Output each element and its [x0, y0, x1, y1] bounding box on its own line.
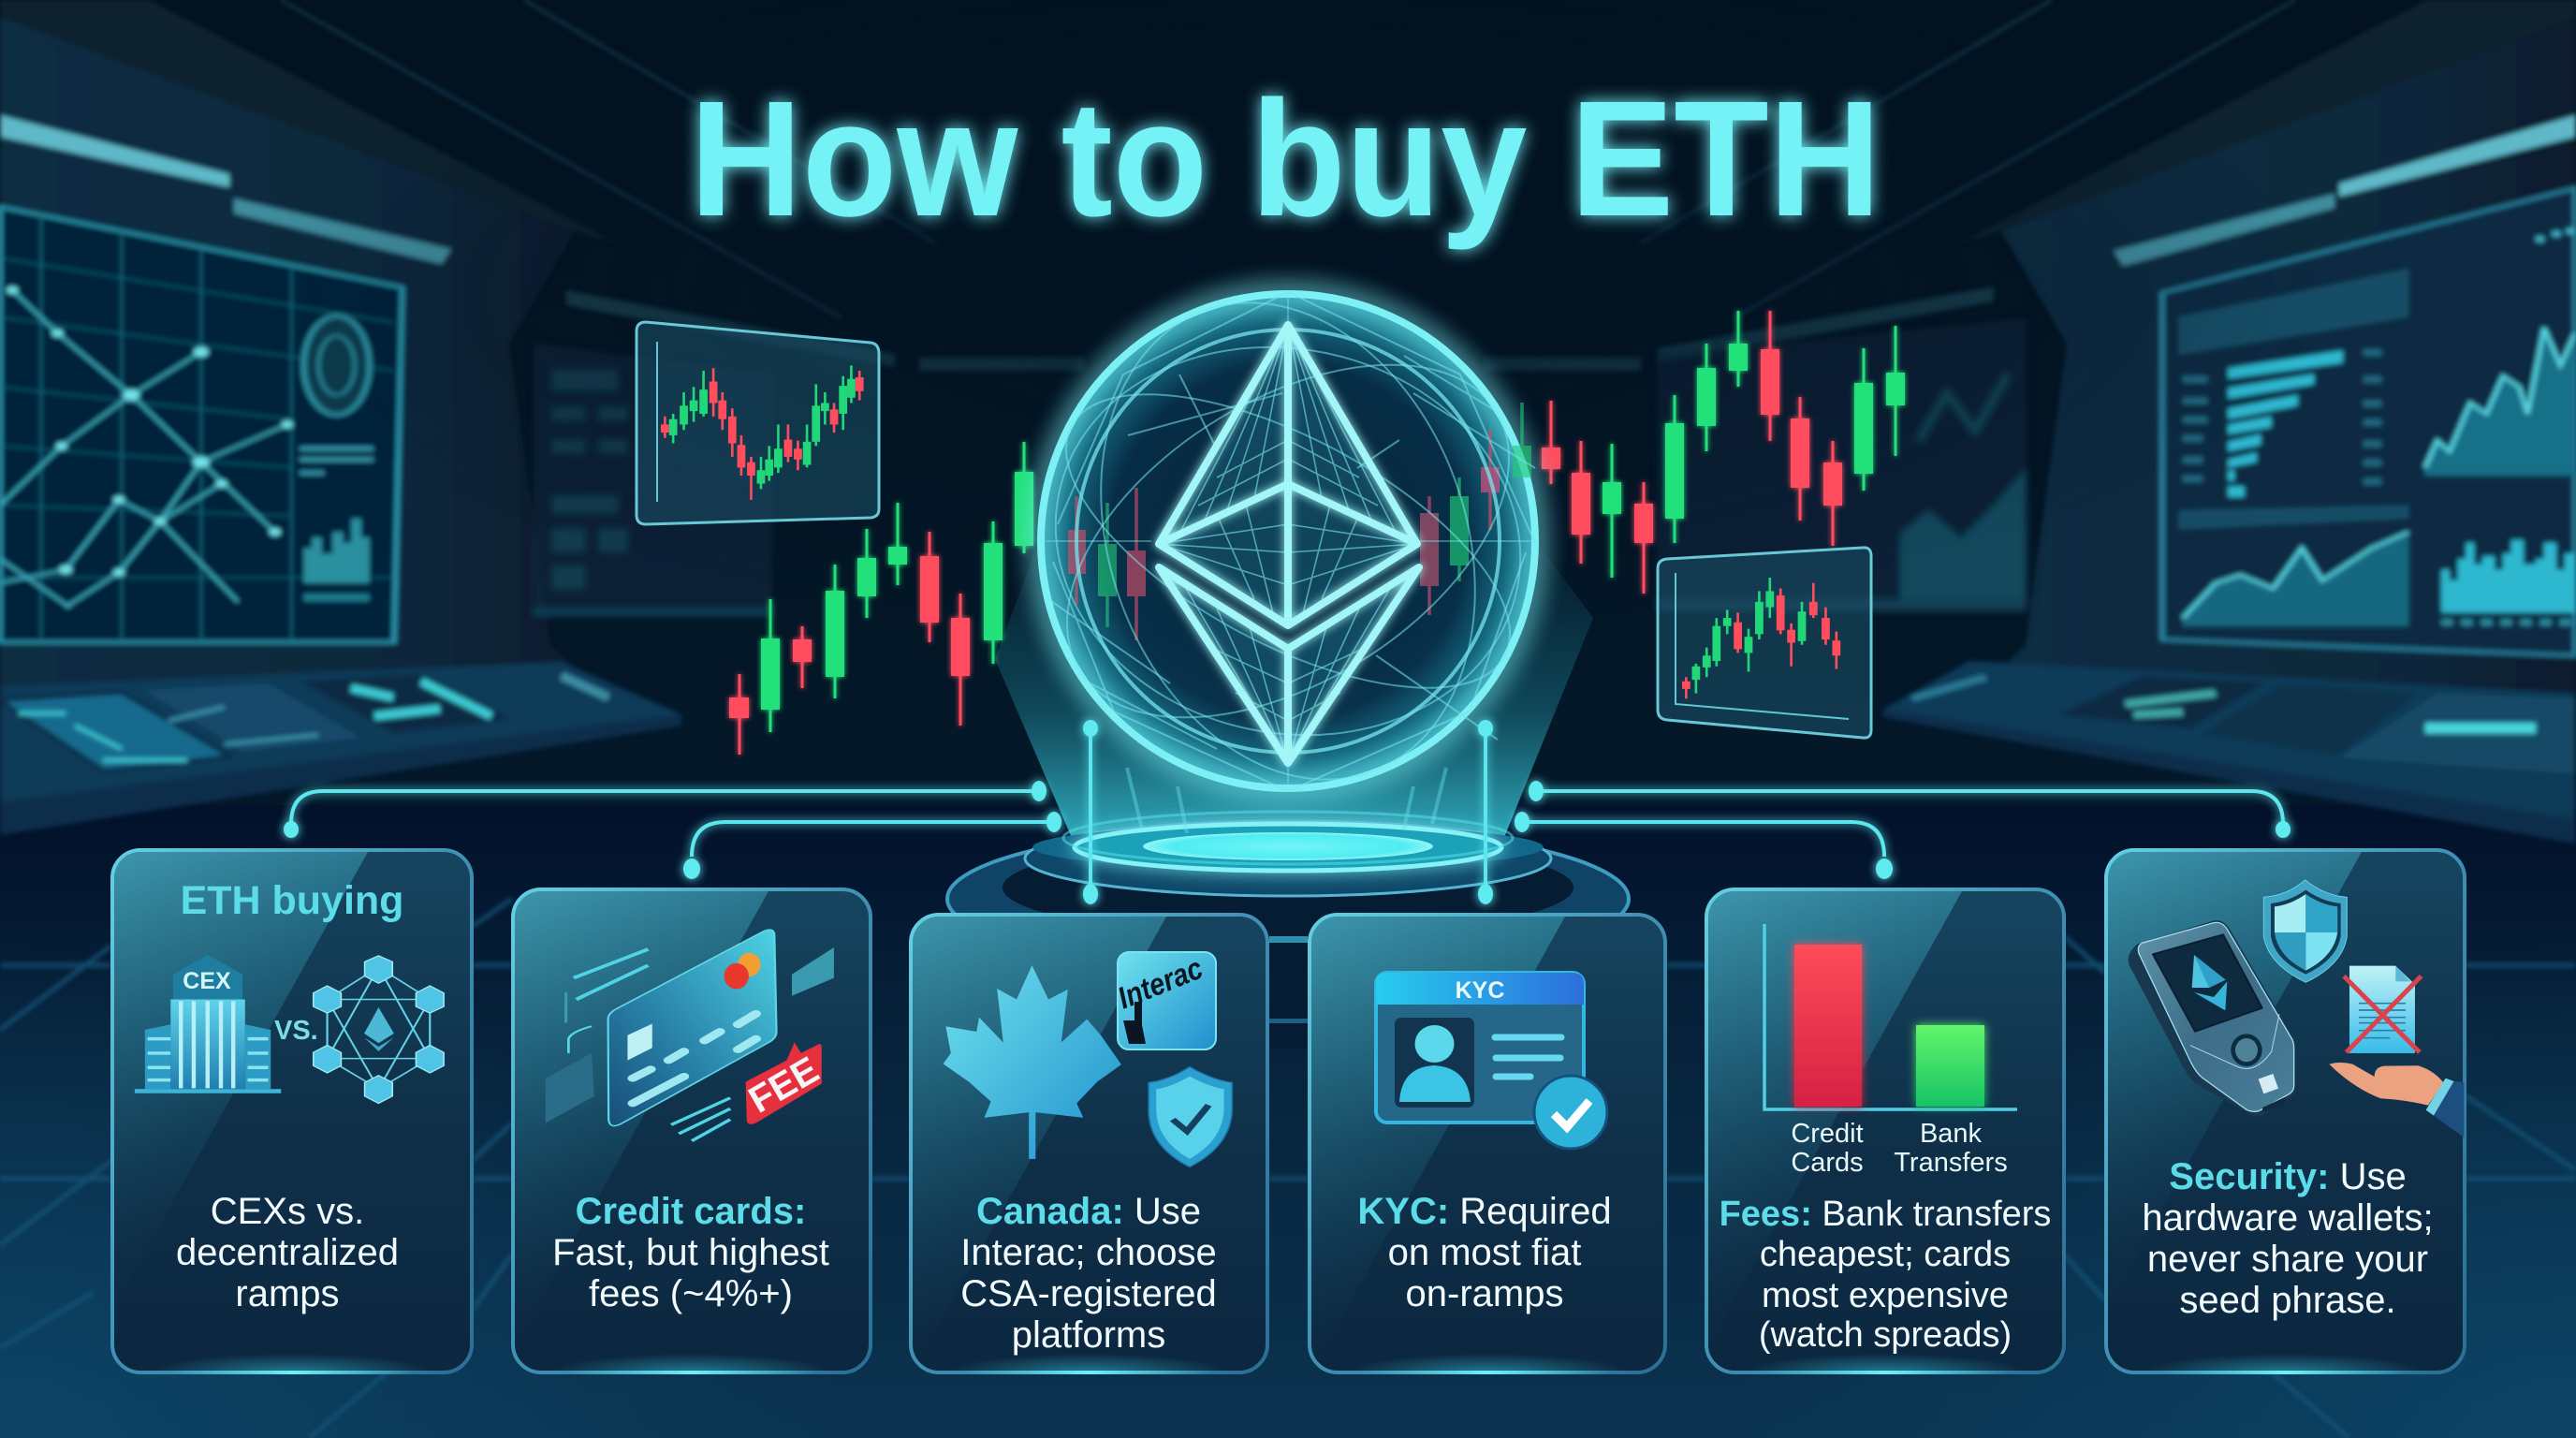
- text: security advice: seed phrase.: [2179, 1280, 2396, 1321]
- hologram light beam: [995, 541, 1593, 844]
- icon: credit card with fee tag: [546, 930, 834, 1141]
- card: security: [2106, 850, 2465, 1374]
- text: fees summary: most expensive: [1762, 1276, 2009, 1315]
- card: ETH buying: [112, 850, 472, 1374]
- Ethereum diamond: [1159, 325, 1419, 763]
- bar chart: fee comparison: [1764, 924, 2017, 1178]
- bar: bank transfers: [1916, 1025, 1984, 1107]
- icon: credit card with fee tag: FEE: [742, 1049, 826, 1122]
- middle tier: [1025, 821, 1551, 896]
- central orb with Ethereum logo: [1005, 250, 1571, 832]
- right console: [1883, 661, 2575, 844]
- upper disk: [1032, 825, 1544, 870]
- heading: ETH buying: ETH buying: [181, 878, 403, 923]
- icon: crossed-out seed phrase: [2344, 966, 2422, 1053]
- mid screen right: [1657, 318, 2027, 612]
- icon: CEX building: [135, 955, 281, 1093]
- floor lines: [0, 899, 2576, 1438]
- glass sphere: [1041, 294, 1535, 788]
- text: Canada Interac CSA: CSA-registered: [960, 1273, 1217, 1314]
- text: CEXs vs. decentralized ramps: ramps: [235, 1273, 340, 1314]
- floating chart panel, left: [637, 322, 879, 524]
- icon: Interac logo: [1113, 950, 1216, 1049]
- text: credit cards fees: Credit cards:: [576, 1191, 806, 1232]
- axis label: credit cards: Credit: [1791, 1119, 1864, 1149]
- icon: security shield: [1149, 1066, 1232, 1167]
- mid screen left: [534, 344, 772, 616]
- text: Canada Interac CSA: platforms: [1012, 1314, 1165, 1356]
- title: How to buy ETH: [690, 67, 1881, 251]
- card: Canada: [911, 915, 1267, 1374]
- icon: KYC ID card with check: [1376, 973, 1607, 1149]
- left wall panel: [0, 17, 580, 712]
- icon: decentralized network: [314, 956, 444, 1104]
- platform pedestal: [936, 768, 1640, 988]
- text: credit cards fees: Fast, but highest: [552, 1232, 829, 1273]
- text: Canada Interac CSA: Interac; choose: [960, 1232, 1217, 1273]
- icon: hardware wallet: [2129, 920, 2296, 1116]
- text: KYC required: KYC: Required: [1357, 1191, 1612, 1232]
- card: fees: [1706, 889, 2064, 1374]
- background strip lights: [566, 286, 1994, 371]
- axis label: bank transfers: Bank: [1920, 1119, 1983, 1149]
- text: security advice: hardware wallets;: [2142, 1197, 2434, 1239]
- lower tier: [947, 826, 1629, 972]
- text: CEXs vs. decentralized ramps: decentralized: [176, 1232, 399, 1273]
- floating chart panel, right: [1658, 548, 1871, 738]
- text: fees summary: (watch spreads): [1759, 1315, 2012, 1355]
- faded candles behind sphere glass: [1068, 403, 1531, 640]
- face wireframes: [1159, 325, 1419, 763]
- text: security advice: Security: Use: [2169, 1156, 2407, 1197]
- logo outline: [1159, 325, 1419, 763]
- label: vs.: VS.: [274, 1016, 318, 1046]
- text: security advice: never share your: [2147, 1239, 2428, 1280]
- connectors from orb to cards: [284, 720, 2291, 904]
- left console: [0, 662, 681, 835]
- axis label: credit cards: Cards: [1791, 1148, 1864, 1178]
- right main screen: [2162, 188, 2575, 655]
- text: fees summary: Fees: Bank transfers: [1720, 1195, 2051, 1234]
- icon: CEX building: CEX: [183, 968, 231, 994]
- bar: credit cards: [1794, 945, 1862, 1107]
- text: KYC required: on most fiat: [1388, 1232, 1581, 1273]
- icon: Interac logo: Interac: [1113, 950, 1208, 1015]
- right wall panel: [1996, 17, 2576, 712]
- text: Canada Interac CSA: Canada: Use: [976, 1191, 1201, 1232]
- icon: maple leaf: [944, 965, 1121, 1159]
- text: credit cards fees: fees (~4%+): [589, 1273, 793, 1314]
- gap between centre cards: [1269, 936, 1308, 1049]
- card: credit cards: [513, 889, 871, 1374]
- sphere wireframe: [1005, 250, 1571, 832]
- card: KYC: [1310, 915, 1665, 1374]
- text: fees summary: cheapest; cards: [1760, 1235, 2011, 1274]
- icon: shield: [2263, 880, 2347, 982]
- left main screen: [0, 207, 402, 642]
- ceiling lights: [0, 115, 2576, 266]
- icon: open hand: [2329, 1063, 2464, 1137]
- text: KYC required: on-ramps: [1406, 1273, 1563, 1314]
- axis label: bank transfers: Transfers: [1894, 1148, 2008, 1178]
- candlestick chart, main: [729, 311, 1905, 755]
- icon: KYC ID card with check: KYC: [1456, 977, 1504, 1004]
- text: CEXs vs. decentralized ramps: CEXs vs.: [211, 1191, 364, 1232]
